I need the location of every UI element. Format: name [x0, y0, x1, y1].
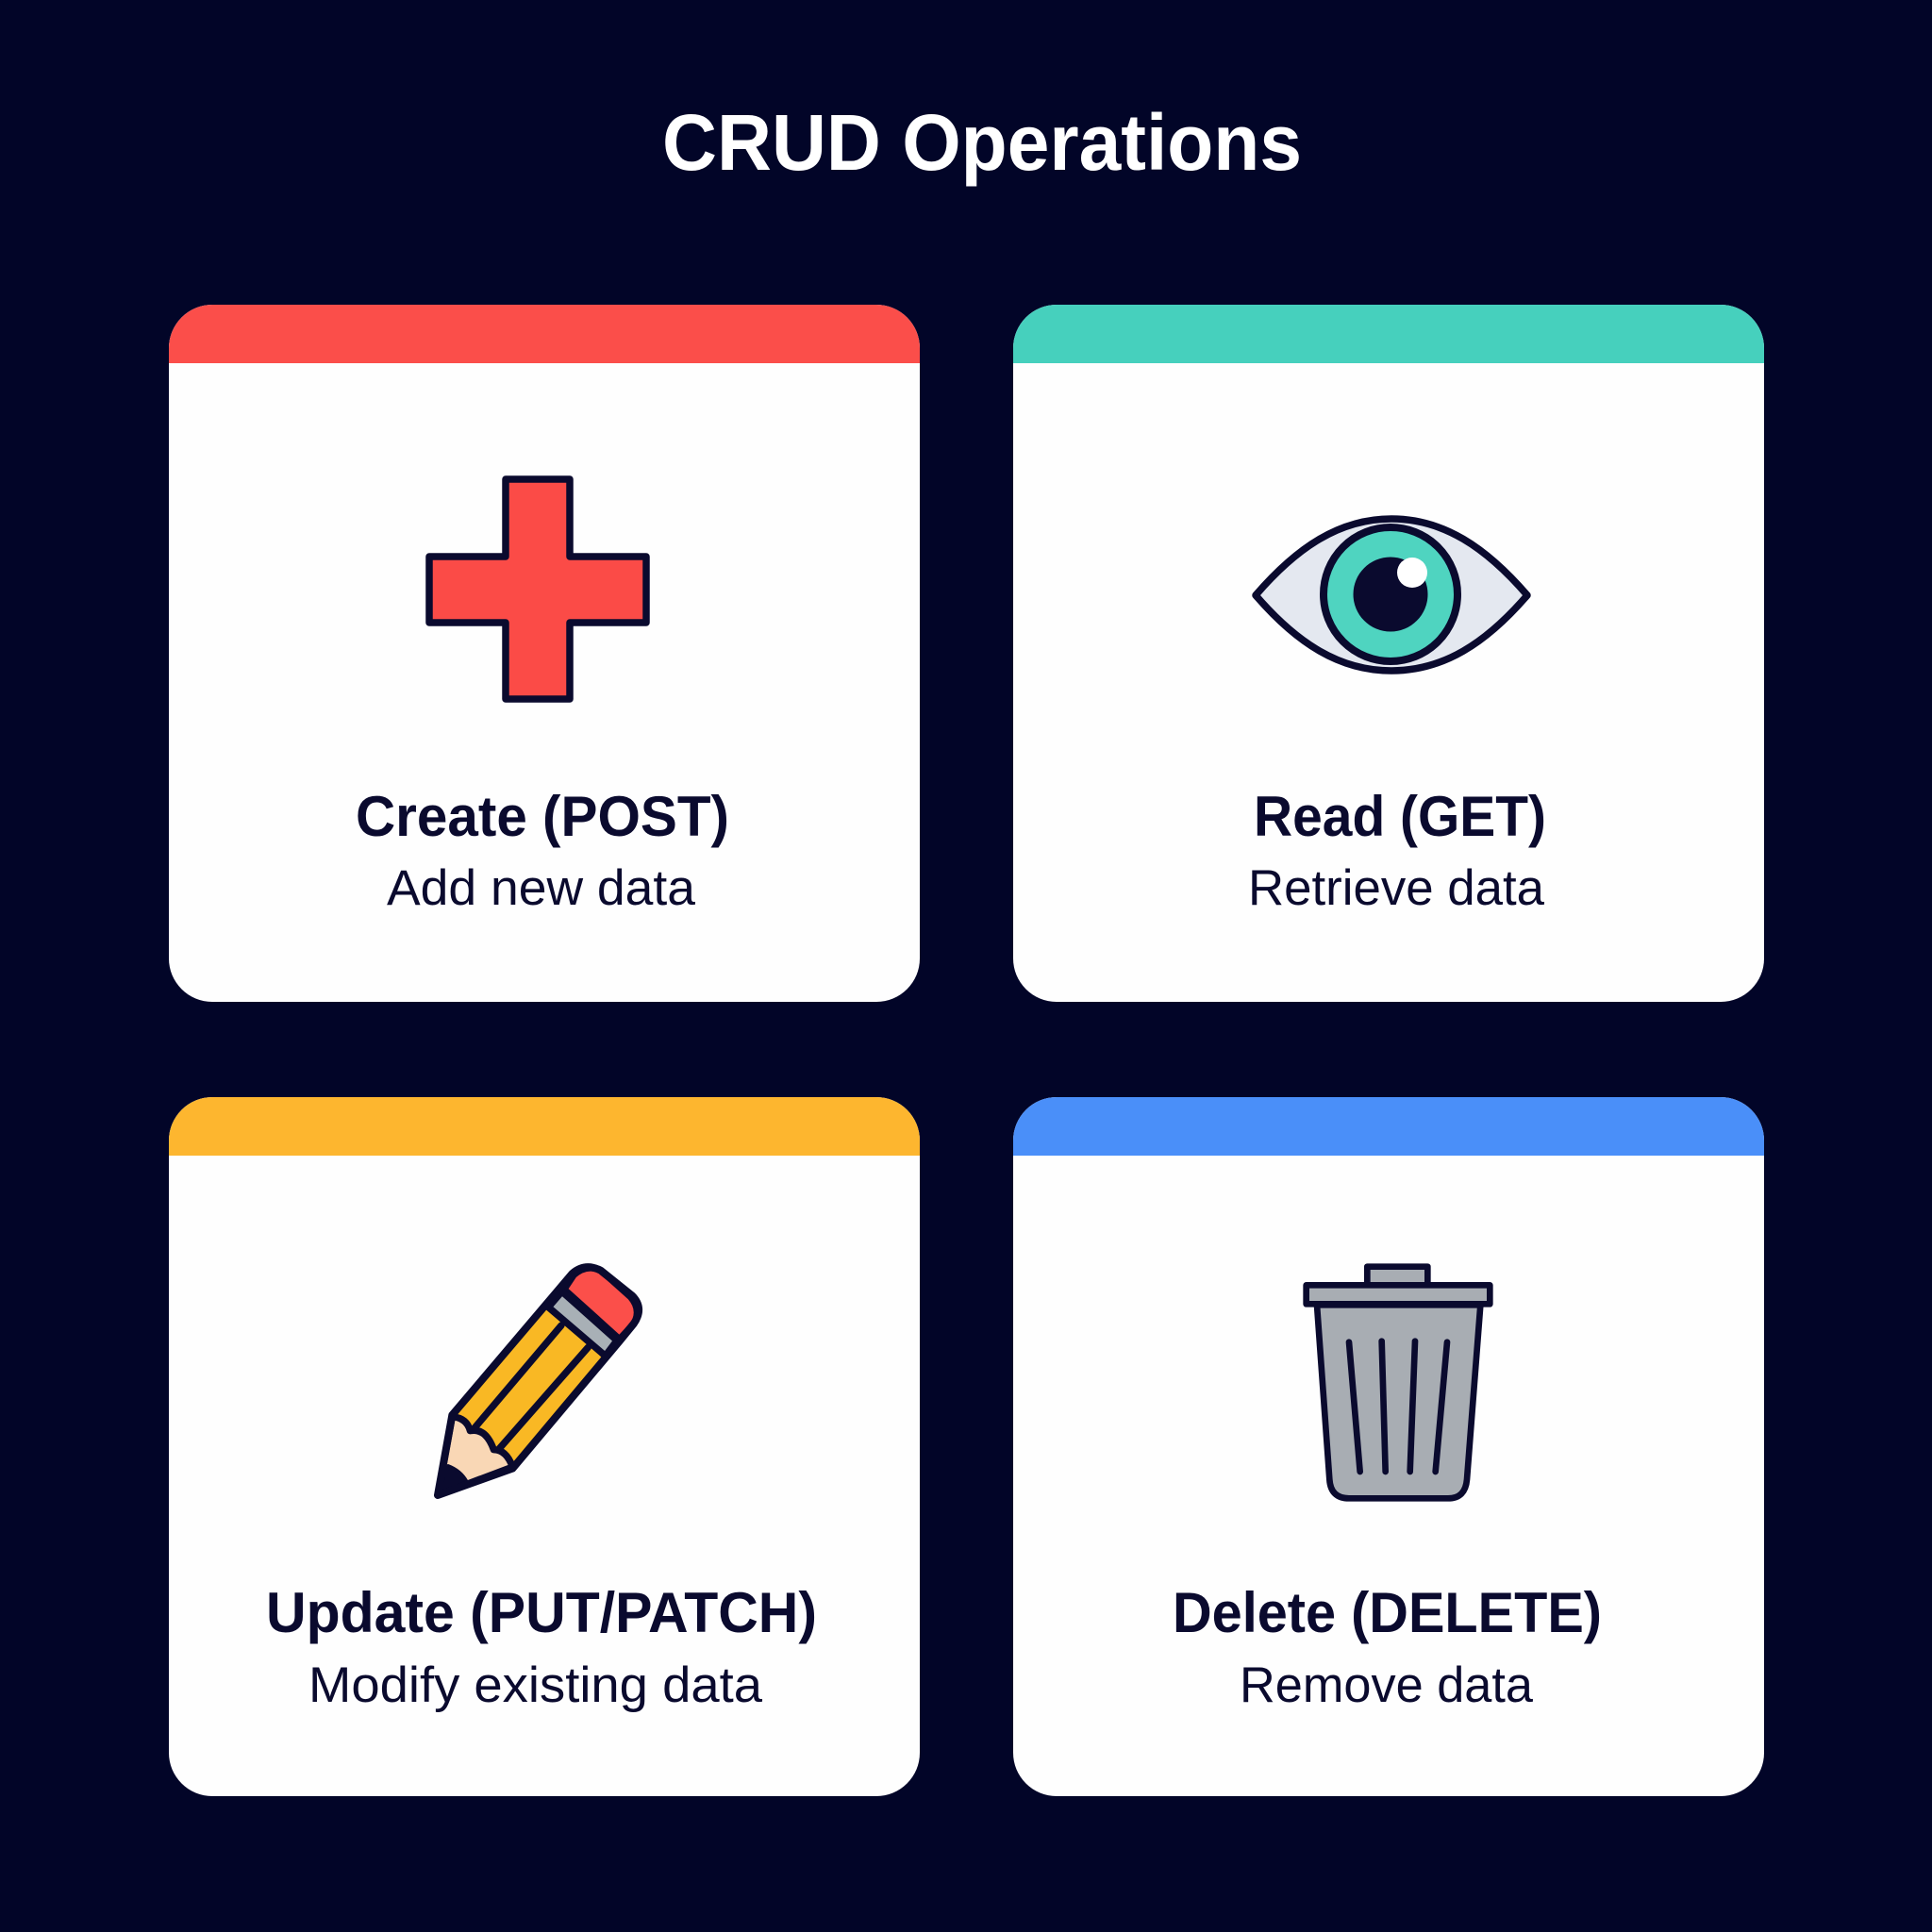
panel: delete	[1013, 1097, 1764, 1796]
heading: create: Create (POST)	[356, 785, 729, 848]
card background	[1013, 305, 1764, 1002]
icon: eye	[1256, 519, 1527, 671]
header bar: blue	[1013, 1097, 1764, 1156]
description: read: Retrieve data	[1248, 860, 1545, 916]
panel: read	[1013, 305, 1764, 1002]
description: update: Modify existing data	[308, 1657, 763, 1713]
description: delete: Remove data	[1240, 1657, 1534, 1713]
icon: plus	[429, 479, 646, 699]
card background	[169, 305, 920, 1002]
icon: trash can	[1307, 1267, 1490, 1498]
heading: update: Update (PUT/PATCH)	[266, 1581, 817, 1644]
card background	[169, 1097, 920, 1796]
panel: update	[169, 1097, 920, 1796]
card background	[1013, 1097, 1764, 1796]
heading: delete: Delete (DELETE)	[1173, 1581, 1602, 1644]
header bar: yellow	[169, 1097, 920, 1156]
header bar: red	[169, 305, 920, 363]
header bar: teal	[1013, 305, 1764, 363]
title: CRUD Operations	[662, 98, 1302, 187]
heading: read: Read (GET)	[1254, 785, 1546, 848]
icon: pencil	[438, 1267, 639, 1495]
description: create: Add new data	[387, 860, 696, 916]
panel: create	[169, 305, 920, 1002]
